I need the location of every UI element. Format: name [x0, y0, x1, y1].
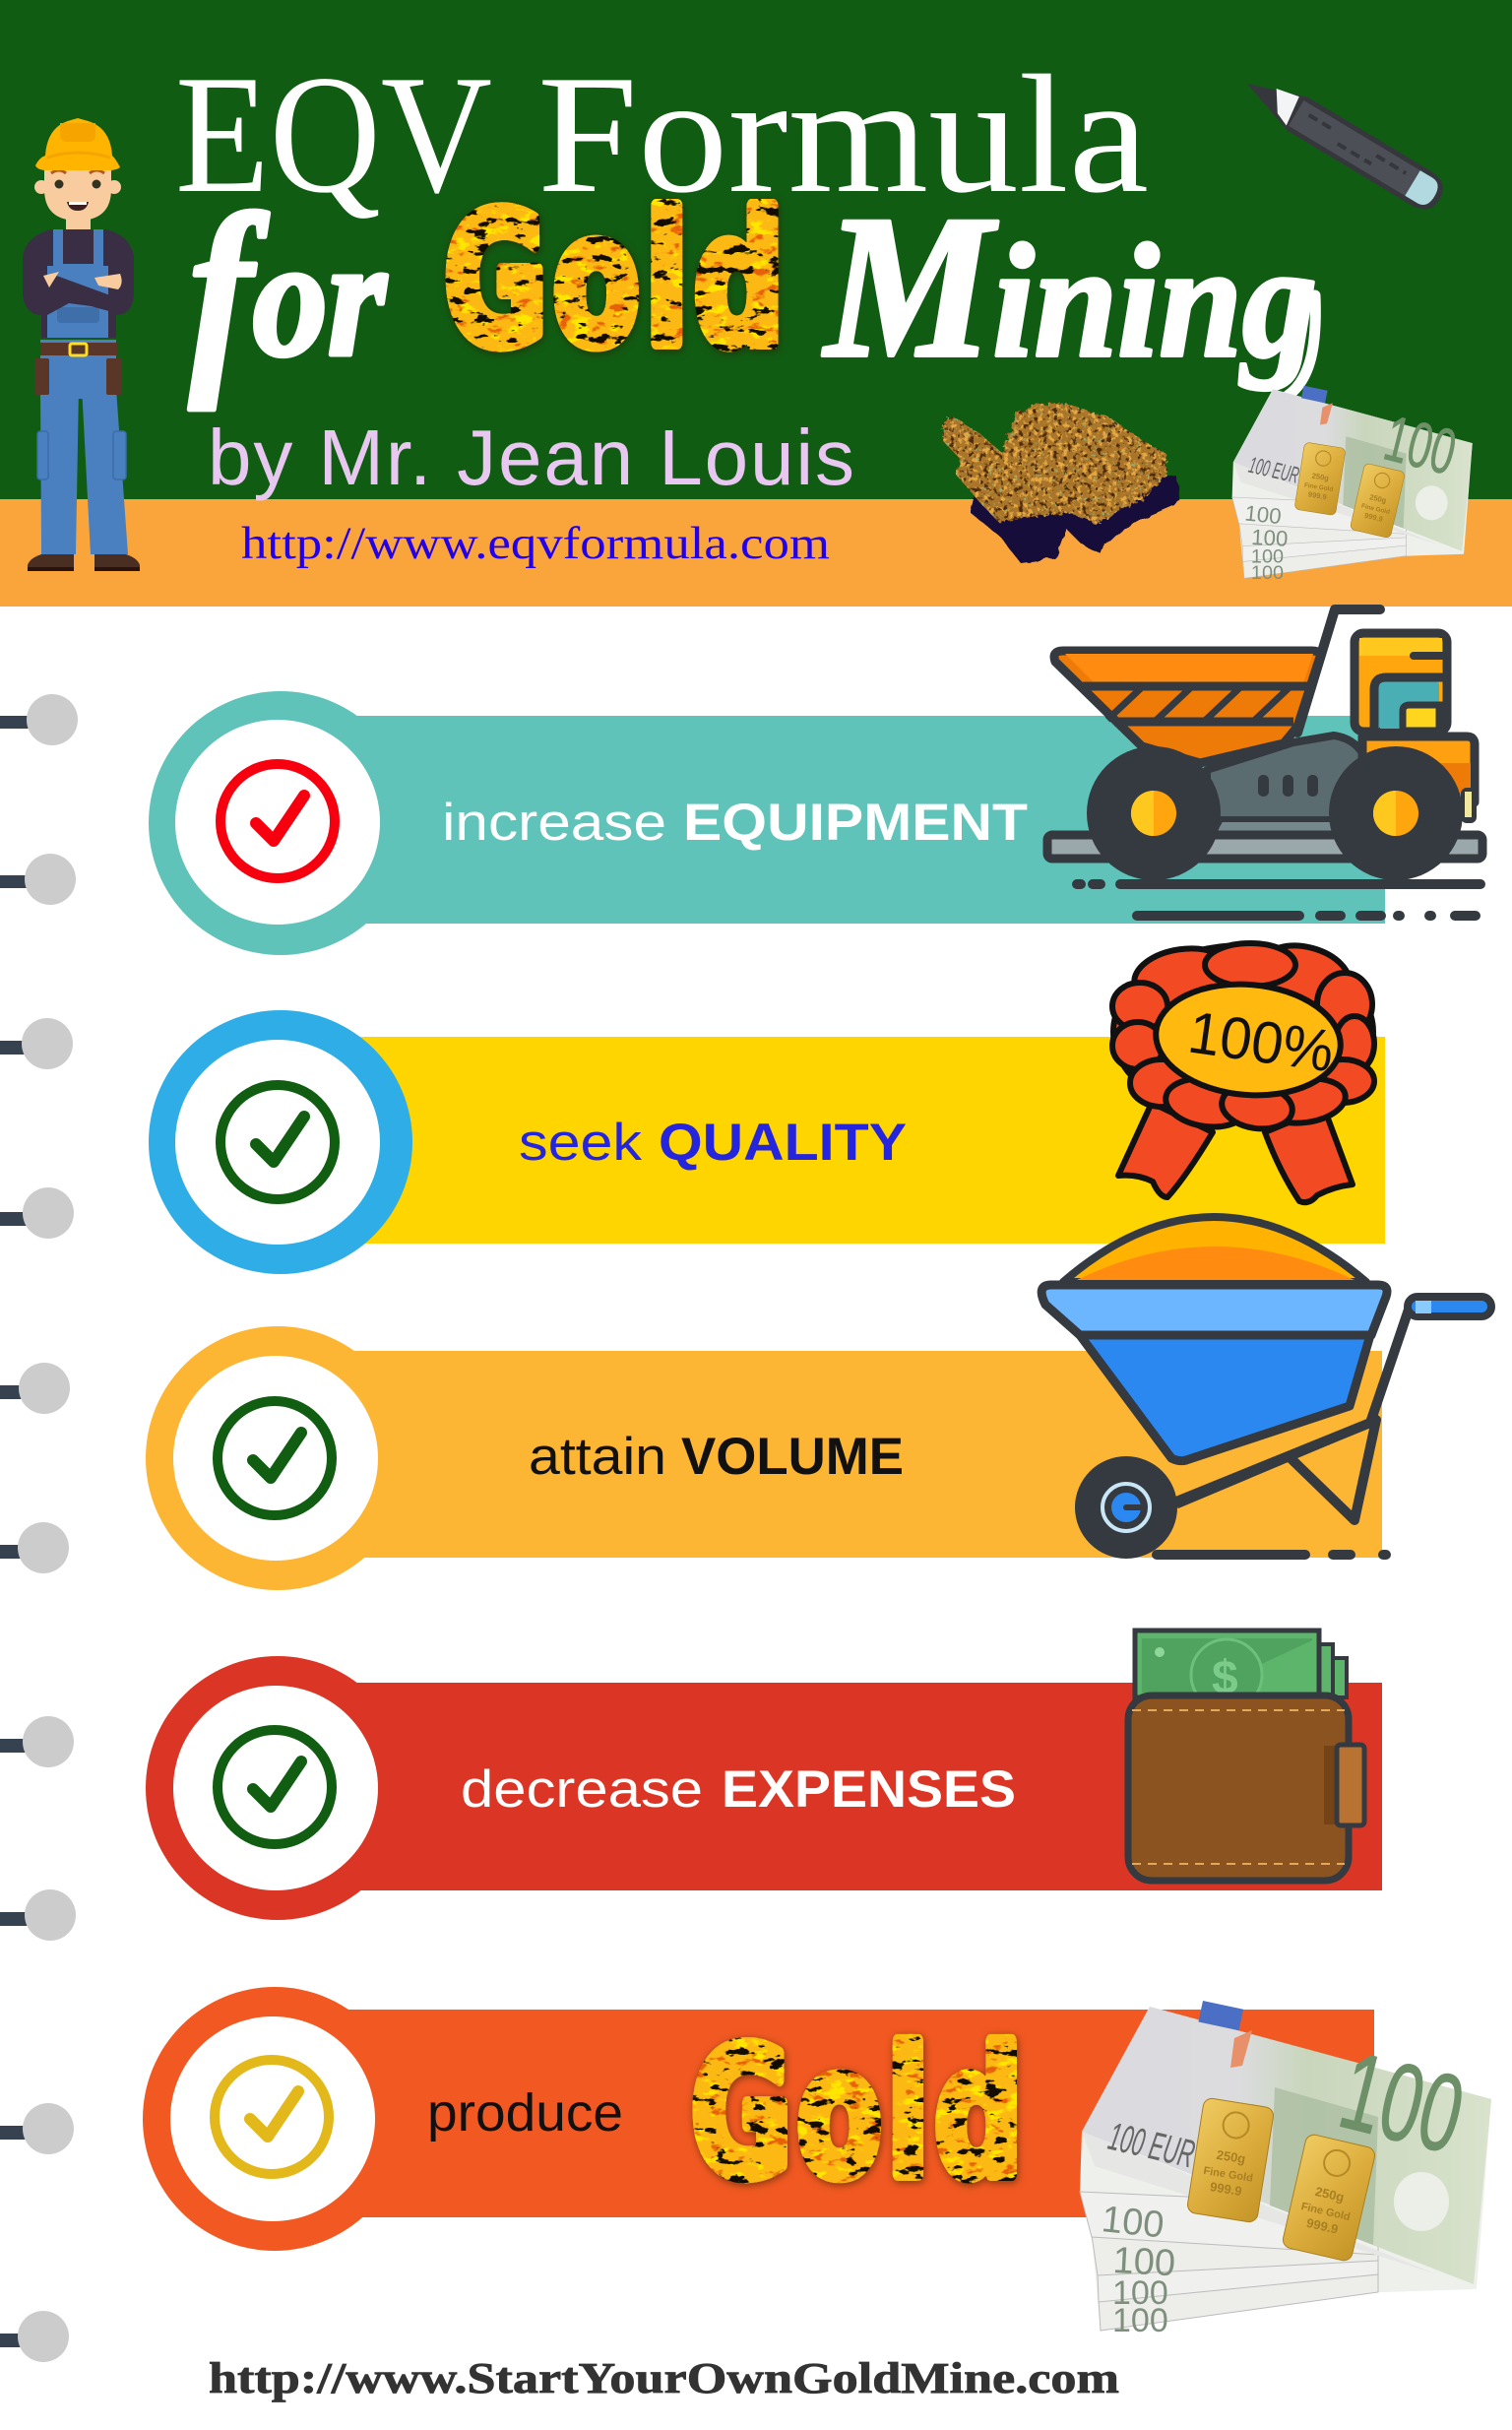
image: euro notes and gold bars, small: [1232, 386, 1473, 584]
label: seek QUALITY: QUALITY: [659, 1114, 907, 1172]
image: euro notes and gold bars, small: 100: [1251, 525, 1289, 551]
icon: 100 percent rosette: [1112, 936, 1374, 1202]
decorative left binder markers: [0, 694, 78, 2362]
panel: produce gold: [143, 1987, 1374, 2251]
panel: attain volume: [146, 1326, 1382, 1590]
website link: http://www.eqvformula.com: [241, 518, 830, 569]
image: euro notes and gold bars, large: 100: [1112, 2274, 1168, 2312]
icon: wallet: [1128, 1631, 1364, 1881]
label: increase EQUIPMENT: increase: [442, 794, 666, 852]
label: seek QUALITY: seek: [519, 1114, 643, 1172]
image: euro notes and gold bars, large: Fine Gold: [1300, 2201, 1352, 2223]
title: Gold textured word: Gold: [444, 176, 789, 386]
icon: pencil: [1237, 67, 1450, 217]
image: euro notes and gold bars, large: 999.9: [1209, 2179, 1243, 2199]
icon: wallet: $: [1212, 1652, 1238, 1704]
image: euro notes and gold bars, large: 250g: [1216, 2147, 1246, 2166]
image: euro notes and gold bars, small: 100: [1251, 562, 1284, 584]
image: euro notes and gold bars, small: Fine Gold: [1360, 503, 1391, 516]
icon: 100 percent rosette: 100%: [1184, 999, 1338, 1084]
image: euro notes and gold bars, large: Fine Gold: [1203, 2165, 1254, 2185]
title: EQV Formula: Formula: [537, 41, 1149, 228]
label: Gold textured word: Gold: [691, 2012, 1028, 2216]
label: attain VOLUME: VOLUME: [681, 1428, 904, 1486]
footer website link: http://www.StartYourOwnGoldMine.com: [209, 2354, 1119, 2402]
title: Mining: Mining: [822, 173, 1317, 400]
label: produce: produce: [427, 2083, 623, 2142]
icon: red check: [220, 764, 335, 878]
icon: green check: [218, 1730, 332, 1844]
image: euro notes and gold bars, large: 100 EUR: [1104, 2115, 1199, 2177]
label: decrease EXPENSES: EXPENSES: [722, 1760, 1016, 1819]
label: attain VOLUME: attain: [529, 1428, 666, 1486]
image: euro notes and gold bars, large: 100: [1112, 2302, 1168, 2339]
image: euro notes and gold bars, small: Fine Gold: [1303, 481, 1334, 493]
title: for: or: [253, 205, 388, 392]
title: for: f: [189, 170, 261, 411]
image: euro notes and gold bars, large: 100: [1100, 2199, 1166, 2247]
header panel: [0, 0, 1512, 607]
image: euro notes and gold bars, small: 100: [1243, 500, 1283, 529]
icon: dump truck: [1047, 609, 1482, 916]
image: euro notes and gold bars, large: 999.9: [1305, 2215, 1340, 2237]
label: increase EQUIPMENT: EQUIPMENT: [683, 794, 1028, 852]
image: euro notes and gold bars, small: 100: [1378, 402, 1463, 488]
image: euro notes and gold bars, small: 999.9: [1307, 490, 1327, 501]
panel: seek quality: [149, 1010, 1385, 1274]
image: euro notes and gold bars, small: 250g: [1368, 492, 1388, 505]
byline: by Mr. Jean Louis: [208, 414, 854, 501]
icon: wheelbarrow: [1041, 1217, 1491, 1559]
panel: increase equipment: [149, 691, 1385, 955]
image: euro notes and gold bars, large: 250g: [1314, 2184, 1346, 2205]
image: euro notes and gold bars, small: 100 EUR: [1246, 452, 1301, 488]
image: euro notes and gold bars, small: 999.9: [1363, 511, 1384, 524]
image: euro notes and gold bars, small: 250g: [1311, 472, 1330, 482]
image: gold nugget: [942, 404, 1181, 563]
icon: green check: [220, 1085, 335, 1199]
image: euro notes and gold bars, small: 100: [1251, 546, 1284, 568]
image: euro notes and gold bars, large: 100: [1112, 2240, 1176, 2284]
title: EQV Formula: EQV: [175, 41, 492, 228]
icon: gold check: [215, 2060, 329, 2174]
panel: decrease expenses: [146, 1656, 1382, 1920]
label: decrease EXPENSES: decrease: [461, 1760, 703, 1819]
image: euro notes and gold bars, large: [1080, 2001, 1491, 2339]
icon: green check: [218, 1401, 332, 1515]
icon: worker: [23, 118, 140, 571]
